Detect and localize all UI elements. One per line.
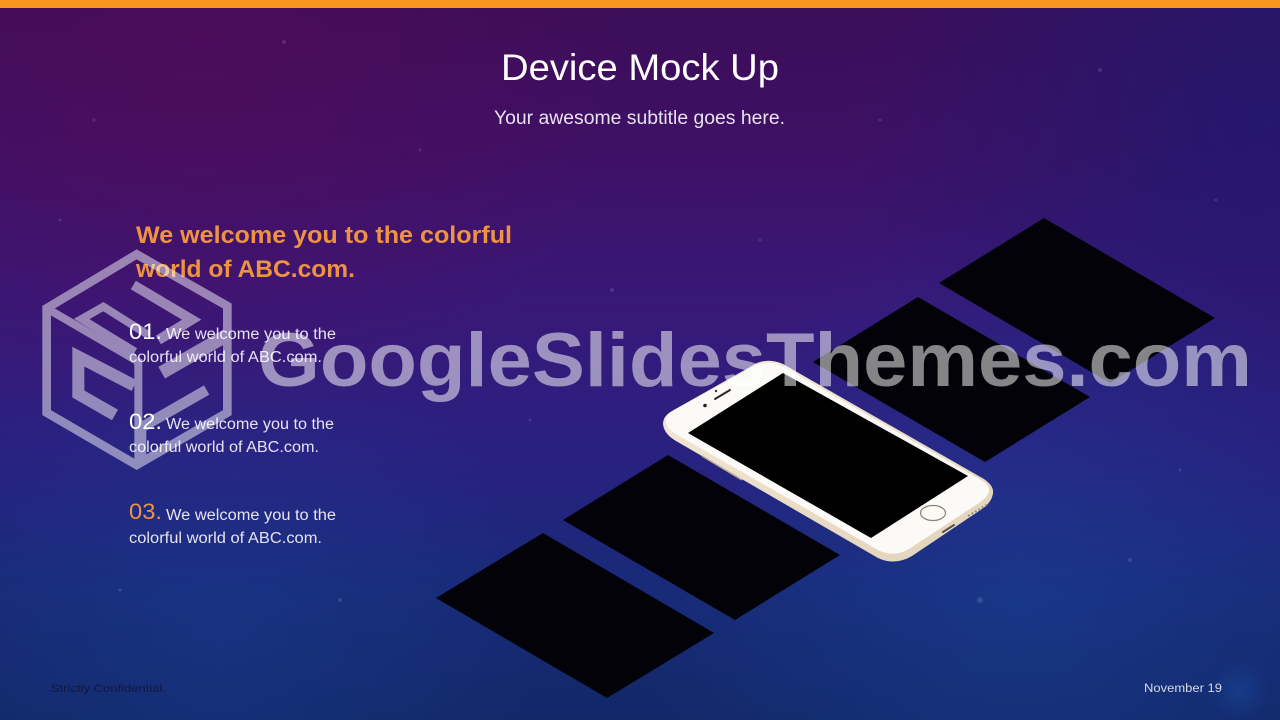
camera [703, 404, 707, 407]
sensor [715, 390, 717, 392]
title: Device Mock Up [501, 47, 779, 88]
list item 03: 03. [129, 499, 162, 524]
screen panel 2 [813, 297, 1090, 462]
device mockup group [436, 218, 1215, 698]
heading [135, 222, 512, 283]
list item 01: colorful world of ABC.com. [129, 349, 322, 366]
footer right: November 19 [1144, 683, 1222, 695]
heading: world of ABC.com. [135, 256, 355, 283]
charging port [943, 525, 954, 532]
watermark text: GoogleSlidesThemes.com [258, 318, 1252, 403]
speaker [715, 390, 730, 399]
side buttons [702, 456, 742, 480]
list item 03: colorful world of ABC.com. [129, 530, 322, 547]
heading: We welcome you to the colorful [136, 222, 512, 249]
list item 01 [129, 319, 336, 366]
speaker grille [968, 504, 988, 516]
list item 01: 01. [129, 319, 162, 344]
list item 03 [129, 499, 336, 547]
watermark logo [47, 254, 227, 465]
home button [920, 506, 946, 520]
list item 02: 02. [129, 409, 162, 434]
screen panel 3 [563, 455, 840, 620]
footer left: Strictly Confidential. [51, 683, 166, 695]
list item 02: We welcome you to the [166, 416, 334, 433]
phone screen [688, 373, 968, 538]
phone [663, 361, 993, 562]
list item 02 [129, 409, 334, 456]
list item 02: colorful world of ABC.com. [129, 439, 319, 456]
screen panel 4 [436, 533, 714, 698]
screen panel 1 [939, 218, 1215, 383]
subtitle: Your awesome subtitle goes here. [494, 108, 785, 129]
list item 03: We welcome you to the [166, 507, 336, 524]
top accent bar [0, 0, 1280, 8]
list item 01: We welcome you to the [166, 326, 336, 343]
